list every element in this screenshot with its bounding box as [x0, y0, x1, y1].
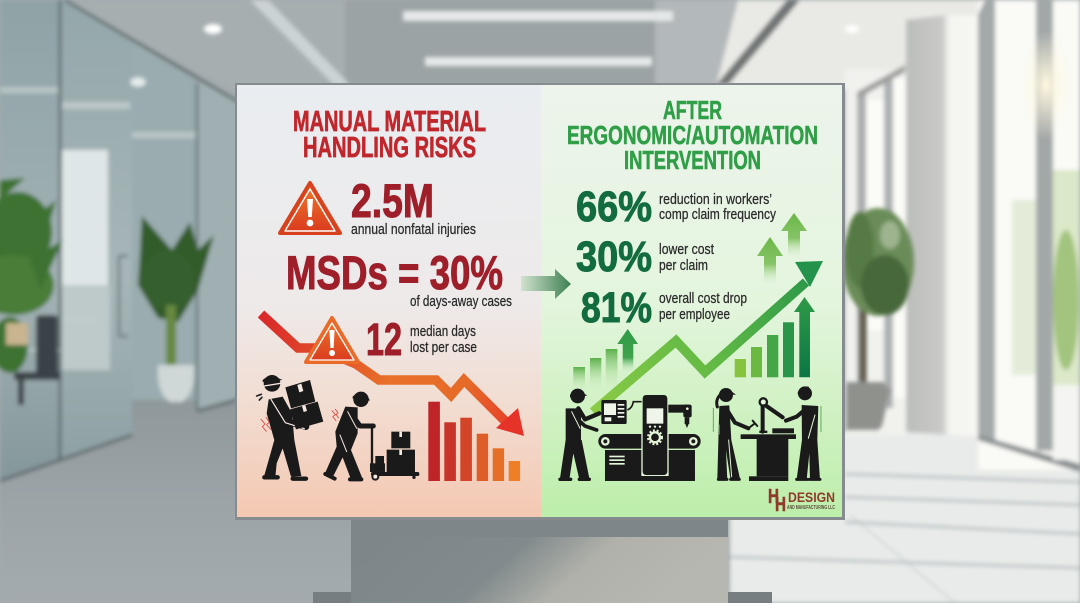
stat: 12 median days: median days [410, 323, 476, 340]
stat: 66%: comp claim frequency [659, 206, 776, 223]
glass partition left [0, 0, 240, 481]
stat: MSDs 30%: of days-away cases [410, 293, 512, 310]
stat: 12 median days: 12 [366, 314, 402, 365]
heading: after intervention: AFTER [663, 95, 722, 125]
display stand [313, 519, 772, 603]
stat: 81%: overall cost drop [659, 290, 747, 307]
sun flare [1020, 30, 1072, 140]
heading: risks: HANDLING RISKS [303, 132, 476, 164]
stat: 12 median days [366, 314, 477, 365]
stat: 81% [581, 284, 747, 332]
trend arrow falling [261, 314, 524, 436]
logo: HH Design and Manufacturing: H [775, 494, 786, 516]
logo: HH Design and Manufacturing: DESIGN [788, 490, 835, 505]
heading: risks [293, 106, 486, 164]
plant left [0, 178, 63, 373]
stat: 66%: reduction in workers’ [659, 191, 772, 208]
heading: after intervention [567, 95, 818, 175]
logo: HH Design and Manufacturing: H [768, 486, 779, 508]
stat: MSDs 30% [286, 246, 512, 310]
stat: 2.5M [351, 174, 476, 238]
bar chart rising right [735, 297, 815, 377]
stat: 81%: per employee [659, 306, 730, 323]
ceiling [60, 0, 1000, 90]
icon: conveyor machine with robot arm [598, 395, 701, 481]
icon: warning triangle large [280, 183, 340, 233]
logo: HH Design and Manufacturing: AND MANUFACTURING LLC [787, 505, 835, 511]
stat: 81%: 81% [581, 284, 652, 332]
trend arrow rising [593, 261, 823, 412]
ceiling lights [130, 11, 859, 87]
floor left [0, 400, 800, 603]
stat: 12 median days: lost per case [410, 339, 477, 356]
stat: 66%: 66% [576, 183, 652, 231]
heading: after intervention: ERGONOMIC/AUTOMATION [567, 120, 818, 150]
stat: 2.5M: 2.5M [351, 174, 434, 227]
stat: MSDs 30%: MSDs = 30% [286, 246, 503, 299]
chair [14, 315, 60, 405]
icon: worker at control panel [560, 389, 599, 479]
icon: two workers at ergonomic bench [713, 386, 821, 481]
stat: 30%: 30% [576, 233, 652, 281]
stat: 2.5M: annual nonfatal injuries [351, 221, 476, 238]
sign frame [235, 83, 845, 520]
heading: risks: MANUAL MATERIAL [293, 106, 486, 138]
plant middle [138, 216, 214, 402]
panel: manual handling risks [237, 85, 541, 517]
bar chart falling [428, 402, 520, 481]
bar chart rising left [573, 329, 638, 391]
inner right windows [845, 65, 907, 435]
heading: after intervention: INTERVENTION [624, 145, 761, 175]
icon: warning triangle small [306, 318, 358, 362]
stat: 66% [576, 183, 776, 231]
right wall pillar [906, 15, 978, 437]
floor right [730, 432, 1080, 603]
icon: worker carrying boxes [257, 375, 323, 479]
right window wall [978, 0, 1080, 472]
panel: after intervention [541, 85, 842, 517]
plant right [842, 208, 914, 430]
logo: HH Design and Manufacturing [768, 486, 835, 516]
stat: 30%: lower cost [659, 241, 715, 258]
stat: 30%: per claim [659, 257, 708, 274]
stat: 30% [576, 233, 715, 281]
icon: worker with pallet jack [325, 392, 419, 480]
arrow: before to after [521, 269, 571, 299]
icon: upward faded arrows [757, 213, 807, 286]
